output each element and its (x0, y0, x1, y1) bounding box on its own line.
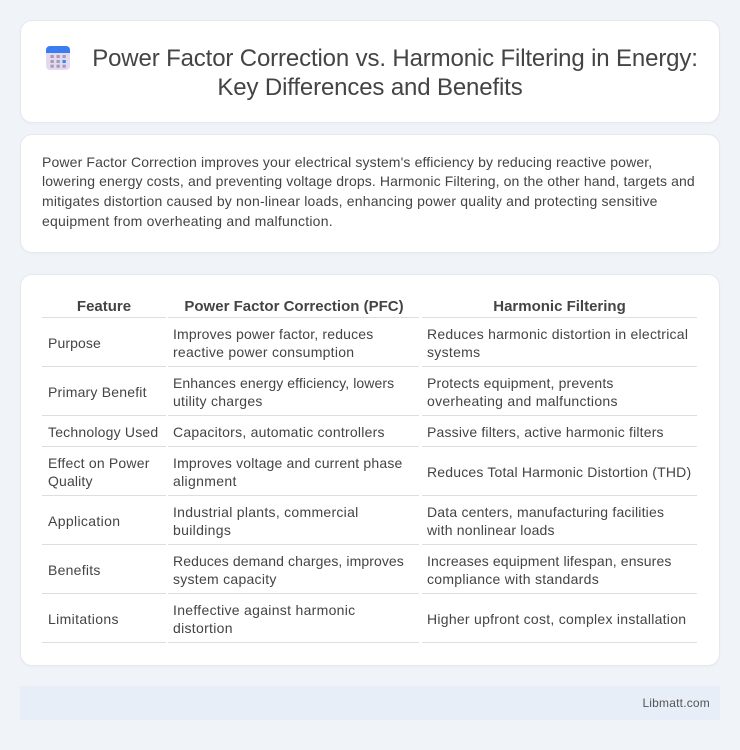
row: Primary Benefit: Enhances energy efficiency, lowers (173, 375, 394, 391)
row: Technology Used: Passive filters, active harmonic filters (427, 424, 664, 440)
intro paragraph: equipment from overheating and malfunction. (42, 213, 333, 229)
row: Primary Benefit: Primary Benefit (48, 384, 147, 400)
footer credit: Libmatt.com (642, 696, 710, 710)
footer bar (20, 686, 720, 720)
row: Application: with nonlinear loads (427, 522, 555, 538)
row: Technology Used: Capacitors, automatic controllers (173, 424, 385, 440)
row: Primary Benefit: Protects equipment, prevents (427, 375, 614, 391)
row: Primary Benefit (48, 375, 618, 409)
row: Effect on Power Quality: Improves voltage and current phase (173, 455, 402, 471)
intro paragraph: mitigates distortion caused by non-linear loads, enhancing power quality and protecting sensitive (42, 193, 658, 209)
row: Effect on Power Quality: Quality (48, 473, 93, 489)
row: Limitations: Limitations (48, 611, 119, 627)
row: Application (48, 504, 664, 538)
row: Purpose: Improves power factor, reduces (173, 326, 373, 342)
row: Limitations (48, 602, 686, 636)
panel: intro text (20, 134, 720, 253)
row: Benefits: Reduces demand charges, improves (173, 553, 404, 569)
row: Effect on Power Quality (48, 455, 691, 489)
table header: Power Factor Correction (PFC) (184, 298, 404, 315)
row: Limitations: Higher upfront cost, complex installation (427, 611, 686, 627)
row: Primary Benefit: utility charges (173, 393, 263, 409)
row: Effect on Power Quality: Effect on Power (48, 455, 150, 471)
intro paragraph (42, 154, 695, 229)
intro paragraph: Power Factor Correction improves your electrical system's efficiency by reducing reactive power, (42, 154, 652, 170)
row: Benefits: compliance with standards (427, 571, 599, 587)
intro paragraph: lowering energy costs, and preventing voltage drops. Harmonic Filtering, on the other hand, targets and (42, 173, 695, 189)
title (92, 45, 698, 101)
table header (77, 298, 626, 315)
row: Purpose: Purpose (48, 335, 101, 351)
row: Limitations: distortion (173, 620, 233, 636)
row: Effect on Power Quality: Reduces Total Harmonic Distortion (THD) (427, 464, 691, 480)
row: Application: buildings (173, 522, 231, 538)
table header: Feature (77, 298, 131, 315)
row: Purpose: reactive power consumption (173, 344, 354, 360)
row: Limitations: Ineffective against harmonic (173, 602, 355, 618)
table rules (42, 317, 697, 643)
row: Purpose: systems (427, 344, 480, 360)
row: Purpose: Reduces harmonic distortion in electrical (427, 326, 688, 342)
title: Key Differences and Benefits (217, 74, 523, 101)
row: Effect on Power Quality: alignment (173, 473, 237, 489)
panel: comparison table (20, 274, 720, 666)
table header: Harmonic Filtering (493, 298, 626, 315)
row: Primary Benefit: overheating and malfunctions (427, 393, 618, 409)
row: Application: Application (48, 513, 120, 529)
row: Application: Industrial plants, commercial (173, 504, 359, 520)
title: Power Factor Correction vs. Harmonic Filtering in Energy: (92, 45, 698, 72)
row: Benefits: system capacity (173, 571, 277, 587)
row: Application: Data centers, manufacturing facilities (427, 504, 664, 520)
row: Technology Used (48, 424, 664, 440)
icon: calendar grid (46, 46, 70, 70)
header card (20, 20, 720, 123)
row: Benefits: Increases equipment lifespan, ensures (427, 553, 672, 569)
row: Technology Used: Technology Used (48, 424, 158, 440)
row: Benefits (48, 553, 672, 587)
row: Benefits: Benefits (48, 562, 101, 578)
row: Purpose (48, 326, 688, 360)
